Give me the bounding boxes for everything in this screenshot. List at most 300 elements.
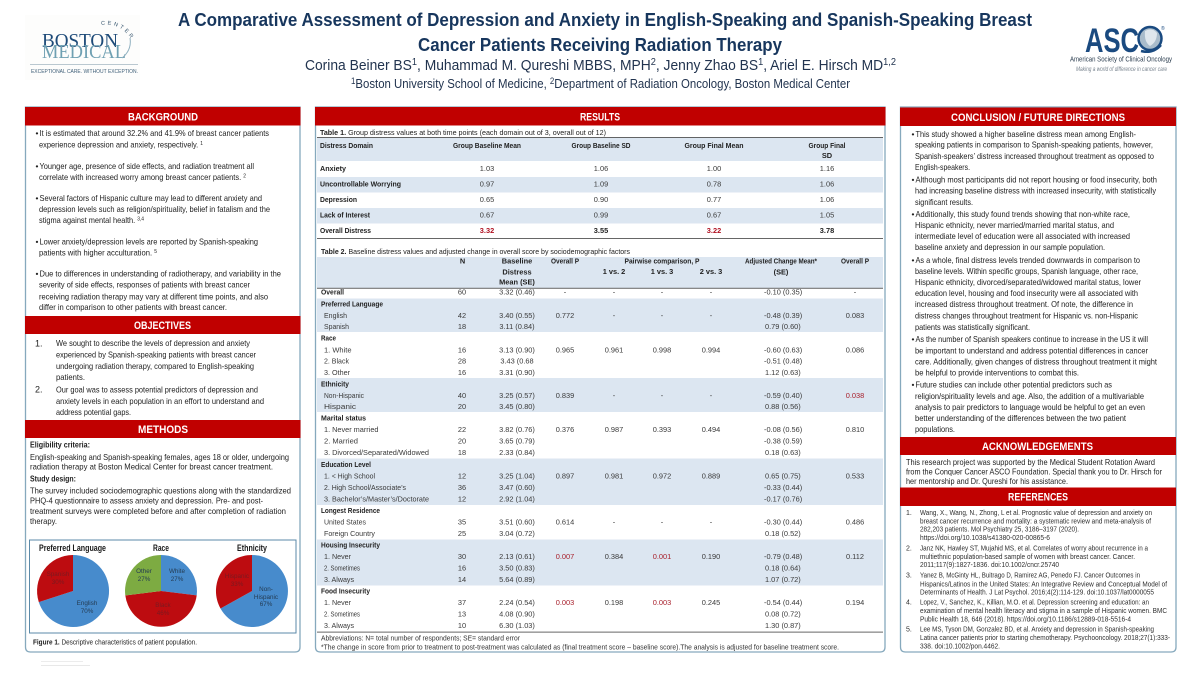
text block: conclusion bullets: be important to understand and address potential differences in cancer	[915, 346, 1148, 356]
group: housing insecurity: 0.190	[702, 552, 720, 561]
group: food insecurity: 10	[458, 621, 466, 630]
text block: objectives list: Our goal was to assess potential predictors of depression and	[56, 384, 258, 394]
list: references: multiethnic population-based sample of women with breast cancer. Cancer.	[920, 554, 1135, 561]
group: housing insecurity: 0.384	[605, 552, 623, 561]
group: food insecurity: 37	[458, 598, 466, 607]
group: education level: 0.897	[556, 471, 574, 480]
group: education level: 0.981	[605, 471, 623, 480]
row: overall distress: Overall Distress	[320, 226, 371, 235]
text block: background bullets: 1	[200, 141, 203, 147]
group: housing insecurity: -0.79 (0.48)	[764, 552, 802, 561]
authors: , Jenny Zhao BS	[656, 57, 758, 74]
row: overall distress	[320, 226, 834, 235]
text block: background bullets: stigma against mental health.	[39, 215, 148, 225]
text block: conclusion bullets: religion/spirituality levels and age. Also, the addition of a multivariable	[915, 391, 1144, 401]
group: marital status: Marital status	[321, 413, 366, 422]
group: education level: Education Level	[321, 460, 371, 469]
group: longest residence: 3.04 (0.72)	[499, 529, 535, 538]
text block: background bullets: It is estimated that around 32.2% and 41.9% of breast cancer patients	[40, 128, 269, 138]
text block: conclusion bullets: baseline anxiety and depression in our sample population.	[915, 242, 1105, 252]
row: uncontrollable worrying: Uncontrollable Worrying	[320, 180, 401, 188]
group: marital status: -0.38 (0.59)	[764, 436, 802, 445]
group: ethnicity: 20	[458, 402, 466, 411]
group: housing insecurity: 0.112	[846, 552, 864, 561]
text block: conclusion bullets: education level, housing and food insecurity were all associated with	[915, 288, 1138, 298]
chart: demographic pie charts	[30, 540, 296, 633]
group: housing insecurity: 1. Never	[324, 552, 352, 561]
text block: conclusion bullets: distress changes throughout treatment for Hispanic vs. non-Hispanic	[915, 310, 1138, 320]
text block: background bullets: receiving radiation therapy may vary at different time points, and also	[39, 292, 268, 302]
row: uncontrollable worrying: 1.09	[594, 180, 608, 188]
logo: Boston Medical Center	[30, 20, 138, 75]
table footnotes: *The change in score from prior to treatment to post-treatment was calculated as (final treatment score – baseline score).The analysis is adjusted for baseline treatment score.	[321, 642, 839, 652]
list: references: Hispanics/Latinos in the United States: An Integrative Review and Conceptual Model of	[920, 582, 1167, 588]
text block: conclusion bullets: Hispanic ethnicity, never married/married marital status, and	[915, 220, 1114, 230]
group: housing insecurity: 0.18 (0.64)	[765, 563, 801, 572]
figure caption: Figure 1. Descriptive characteristics of patient population.	[33, 638, 197, 646]
group: longest residence: Foreign Country	[324, 529, 375, 538]
table 2 header row: Mean (SE)	[499, 278, 535, 286]
group: race: Race	[321, 333, 336, 342]
group: preferred language: 3.11 (0.84)	[499, 322, 535, 331]
text block: background bullets: depression levels such as religion/spirituality, belief in fatalism and the	[39, 204, 270, 214]
group: marital status: 0.376	[556, 425, 574, 434]
group: ethnicity: Ethnicity	[321, 379, 350, 388]
group: food insecurity: 0.245	[702, 598, 720, 607]
pie chart: race: 27%	[171, 576, 184, 583]
text block: conclusion bullets: •	[912, 334, 914, 344]
group: ethnicity: 3.25 (0.57)	[499, 391, 535, 400]
pie chart: preferred language: Preferred Language	[39, 543, 106, 553]
pie chart: race: White	[169, 568, 186, 575]
text block: conclusion bullets: populations.	[915, 424, 955, 434]
row: lack of interest	[320, 210, 834, 220]
text block: acknowledgements: This research project was supported by the Medical Student Rotation Award	[906, 457, 1155, 467]
table 1 header row: Group Final Mean	[684, 141, 744, 150]
group: housing insecurity: 5.64 (0.89)	[499, 575, 535, 584]
group: longest residence: 3.51 (0.60)	[499, 517, 535, 526]
panel: right column	[900, 107, 1176, 652]
group: food insecurity: 2. Sometimes	[324, 609, 360, 618]
group: marital status: 0.810	[846, 425, 864, 434]
group: preferred language: 42	[458, 311, 466, 320]
list: references: 282,203 patients. Mol Psychiatry 25, 3186–3197 (2020).	[920, 526, 1079, 534]
group: longest residence: 25	[458, 529, 466, 538]
group: race: 16	[458, 345, 466, 354]
group: race: 16	[458, 368, 466, 377]
logo: ASCO: Making a world of difference in cancer care	[1076, 66, 1167, 73]
text block: conclusion bullets: patients was statistically significant.	[915, 322, 1030, 332]
list: references: Lee MS, Tyson DM, Gonzalez BD, et al. Anxiety and depression in Spanish-speaking	[920, 626, 1154, 634]
text block: conclusion bullets	[912, 129, 1158, 434]
group: food insecurity: 1.30 (0.87)	[765, 621, 801, 630]
table 2 header row: Adjusted Change Mean*	[745, 256, 817, 266]
group: race: 0.998	[653, 345, 671, 354]
group: housing insecurity: 16	[458, 563, 466, 572]
heading: conclusion and future directions: CONCLUSION / FUTURE DIRECTIONS	[951, 112, 1125, 124]
list: references: Determinants of Health. J Lat Psychol. 2016;4(2):114-129. doi:10.1037/lat0000055	[920, 590, 1154, 596]
heading: methods: METHODS	[138, 424, 188, 436]
group: race: 28	[458, 356, 466, 365]
group: preferred language: 0.083	[846, 311, 864, 320]
list: references: Public Health 18, 646 (2018). https://doi.org/10.1186/s12889-018-5516-4	[920, 616, 1131, 624]
title: A Comparative Assessment of Depression and Anxiety in English-Speaking and Spanish-Speaking Breast	[178, 9, 1032, 30]
group: marital status: 0.18 (0.63)	[765, 448, 801, 457]
group: marital status: 3. Divorced/Separated/Widowed	[324, 448, 429, 457]
heading: background	[25, 107, 300, 126]
text block: conclusion bullets: had increasing baseline distress with increased insecurity, with statistically	[915, 186, 1157, 196]
text block: objectives list	[35, 338, 264, 417]
heading: acknowledgements	[900, 437, 1176, 455]
group: education level: 3. Bachelor’s/Master’s/Doctorate	[324, 494, 429, 503]
pie chart: ethnicity: 33%	[231, 581, 244, 588]
group: race: 0.994	[702, 345, 720, 354]
table 1 header row: Group Baseline SD	[572, 141, 631, 150]
group: marital status: 20	[458, 436, 466, 445]
authors: 2	[651, 57, 656, 68]
group: longest residence: Longest Residence	[321, 506, 380, 515]
group: marital status: 0.393	[653, 425, 671, 434]
affiliations: 1	[351, 76, 355, 86]
group: housing insecurity: 0.007	[556, 552, 574, 561]
group: ethnicity	[321, 379, 864, 411]
text block: conclusion bullets: baseline levels. Within specific groups, Spanish language, other race,	[915, 266, 1138, 276]
group: ethnicity: 0.038	[846, 391, 864, 400]
authors: Corina Beiner BS	[305, 57, 421, 74]
pie chart: preferred language: 30%	[52, 579, 65, 586]
group: race: 3.31 (0.90)	[499, 368, 535, 377]
list: references: https://doi.org/10.1038/s41380-020-00865-6	[920, 535, 1050, 542]
group: longest residence: 35	[458, 517, 466, 526]
pie chart: preferred language: English	[77, 600, 98, 607]
row: overall: -	[710, 287, 713, 296]
group: preferred language: -	[661, 311, 664, 320]
group: education level: 12	[458, 494, 466, 503]
group: race: 0.086	[846, 345, 864, 354]
list: references: Yanez B, McGinty HL, Buitrago D, Ramirez AG, Penedo FJ. Cancer Outcomes in	[920, 572, 1140, 580]
group: food insecurity: 2.24 (0.54)	[499, 598, 535, 607]
group: race: 0.965	[556, 345, 574, 354]
authors: 1	[412, 57, 417, 68]
heading: results	[315, 107, 886, 126]
row: overall: -	[661, 287, 664, 296]
group: education level: 0.533	[846, 471, 864, 480]
text block: objectives list: undergoing radiation therapy, compared to English-speaking	[56, 361, 254, 371]
table 2 header row: 1 vs. 3	[651, 267, 673, 276]
row: depression: 1.06	[820, 195, 834, 204]
text block: conclusion bullets: As a whole, final distress levels trended downwards in comparison to	[916, 255, 1140, 265]
heading: conclusion and future directions	[900, 108, 1176, 126]
text block: background bullets: Lower anxiety/depression levels are reported by Spanish-speaking	[40, 236, 258, 246]
logo: Boston Medical Center: EXCEPTIONAL CARE. WITHOUT EXCEPTION.	[31, 69, 138, 75]
group: food insecurity: 3. Always	[324, 621, 354, 630]
text block: background bullets: •	[36, 268, 38, 278]
affiliations: Boston University School of Medicine,	[355, 76, 550, 91]
list: references: breast cancer recurrence and mortality: a systematic review and meta-analysis of	[920, 518, 1151, 526]
row: overall: -0.10 (0.35)	[764, 287, 802, 296]
table 2 header row: Overall P	[841, 256, 869, 266]
logo: Boston Medical Center: MEDICAL	[42, 41, 126, 63]
list: references: Lopez, V., Sanchez, K., Killian, M.O. et al. Depression screening and education: an	[920, 600, 1149, 606]
row: depression: 0.77	[707, 195, 721, 204]
group: preferred language: -	[613, 311, 616, 320]
group: race: 3. Other	[324, 368, 351, 377]
row: anxiety	[320, 164, 834, 173]
group: ethnicity: -	[661, 391, 664, 400]
row: uncontrollable worrying: 1.06	[820, 180, 834, 188]
group: marital status: 1. Never married	[324, 425, 378, 434]
table footnotes: Abbreviations: N= total number of respondents; SE= standard error	[321, 634, 521, 642]
group: education level: 3.47 (0.60)	[499, 483, 535, 492]
pie chart: race: Race	[153, 543, 169, 553]
group: preferred language: English	[324, 311, 347, 320]
group: housing insecurity: 1.07 (0.72)	[765, 575, 801, 584]
pie chart: race: 27%	[138, 576, 151, 583]
row: overall: Overall	[321, 287, 344, 296]
text block: objectives list: patients.	[56, 372, 85, 382]
text block: conclusion bullets: As the number of Spanish speakers continue to increase in the US it will	[916, 334, 1148, 344]
group: race: 3.43 (0.68	[500, 356, 534, 365]
text block: background bullets: Younger age, presence of side effects, and radiation treatment all	[40, 161, 254, 171]
list: references: 1.	[906, 510, 912, 517]
group: preferred language	[321, 299, 864, 331]
group: education level: 3.25 (1.04)	[499, 471, 535, 480]
row: overall: 60	[458, 287, 466, 296]
group: housing insecurity: 0.001	[653, 552, 671, 561]
row: depression: 0.90	[594, 195, 608, 204]
row: lack of interest: 0.67	[707, 210, 721, 220]
pie chart: preferred language: Spanish	[47, 571, 70, 578]
group: preferred language: 18	[458, 322, 466, 331]
pie chart: ethnicity: Ethnicity	[237, 543, 267, 553]
group: food insecurity: -0.54 (0.44)	[764, 598, 802, 607]
title	[178, 9, 1032, 55]
text block: background bullets: •	[36, 193, 38, 203]
group: marital status: 2.33 (0.84)	[499, 448, 535, 457]
table 2 header row	[460, 256, 869, 286]
group: longest residence: 0.18 (0.52)	[765, 529, 801, 538]
group: food insecurity: 0.194	[846, 598, 864, 607]
pie chart: race	[125, 543, 197, 627]
group: education level: 0.889	[702, 471, 720, 480]
group: ethnicity: -	[613, 391, 616, 400]
table 2 header row: Overall P	[551, 256, 579, 266]
row: uncontrollable worrying: 0.78	[707, 180, 721, 188]
table 2 header row: Pairwise comparison, P	[624, 256, 700, 266]
group: preferred language: 0.772	[556, 311, 574, 320]
logo: Boston Medical Center: BOSTON	[42, 30, 118, 52]
row: overall: 3.32 (0.46)	[499, 287, 535, 296]
text block: conclusion bullets: significant results.	[915, 197, 973, 207]
text block: methods	[30, 440, 291, 526]
group: race: -0.60 (0.63)	[764, 345, 802, 354]
authors: 1,2	[883, 57, 896, 68]
list: references: Latina cancer patients prior to starting chemotherapy. Psychooncology. 2018;27(1):333-	[920, 635, 1171, 642]
row: anxiety: Anxiety	[320, 164, 347, 173]
text block: background bullets: patients with higher acculturation.	[39, 248, 163, 258]
row: anxiety: 1.03	[480, 164, 494, 173]
text block: background bullets: Due to differences in understanding of radiotherapy, and variability in the	[40, 268, 281, 278]
heading: acknowledgements: ACKNOWLEDGEMENTS	[982, 441, 1093, 453]
group: education level: 36	[458, 483, 466, 492]
text block: objectives list: 2.	[35, 384, 43, 394]
group: preferred language: -0.48 (0.39)	[764, 311, 802, 320]
logo: ASCO: American Society of Clinical Oncology	[1070, 54, 1172, 64]
text block: methods: treatment surveys were completed before and after completion of radiation	[30, 506, 286, 516]
group: housing insecurity: 3. Always	[324, 575, 354, 584]
logo: ASCO: ASC	[1085, 22, 1139, 60]
text block: methods: PHQ-4 questionnaire to assess anxiety and depression. Pre- and post-	[30, 496, 263, 506]
list: references: 4.	[906, 600, 912, 606]
group: education level: 2.92 (1.04)	[499, 494, 535, 503]
group: food insecurity	[321, 586, 864, 630]
list: references: 3.	[906, 572, 912, 580]
group: marital status: -0.08 (0.56)	[764, 425, 802, 434]
row: overall: -	[613, 287, 616, 296]
text block: conclusion bullets: Future studies can include other potential predictors such as	[916, 380, 1112, 390]
text block: background bullets: 3,4	[137, 216, 144, 222]
group: food insecurity: 6.30 (1.03)	[499, 621, 535, 630]
group: food insecurity: 4.08 (0.90)	[499, 609, 535, 618]
heading: objectives: OBJECTIVES	[134, 320, 191, 332]
heading: references	[900, 488, 1176, 506]
heading: references: REFERENCES	[1008, 492, 1068, 504]
text block: background bullets: differ in comparison to other patients with breast cancer.	[39, 302, 227, 312]
group: preferred language: Spanish	[324, 322, 349, 331]
heading: background: BACKGROUND	[128, 112, 198, 124]
group: preferred language: 0.79 (0.60)	[765, 322, 801, 331]
pie chart: ethnicity	[216, 543, 288, 627]
text block: background bullets: •	[36, 236, 38, 246]
group: race: 3.13 (0.90)	[499, 345, 535, 354]
text block: conclusion bullets: intermediate level of education were all associated with increased	[915, 231, 1130, 241]
row: overall distress: 3.55	[594, 226, 608, 235]
group: education level: 12	[458, 471, 466, 480]
text block: conclusion bullets: Additionally, this study found trends showing that non-white race,	[916, 209, 1130, 219]
text block: conclusion bullets: speaking patients in comparison to Spanish-speaking patients, however,	[915, 140, 1153, 150]
pie chart: preferred language	[37, 543, 109, 627]
row: lack of interest: Lack of Interest	[320, 210, 370, 220]
logo: ASCO	[1070, 22, 1172, 73]
table footnotes	[321, 634, 839, 652]
logo: ASCO: ®	[1161, 25, 1165, 32]
group: education level	[321, 460, 864, 503]
group: ethnicity: 40	[458, 391, 466, 400]
group: housing insecurity: 30	[458, 552, 466, 561]
table 1 caption: Table 1. Group distress values at both time points (each domain out of 3, overall out of 12)	[320, 128, 606, 137]
text block: acknowledgements	[906, 457, 1162, 486]
group: education level: -0.33 (0.44)	[764, 483, 802, 492]
row: overall: -	[564, 287, 567, 296]
table 2 body rows	[321, 287, 864, 630]
group: marital status: 3.82 (0.76)	[499, 425, 535, 434]
row: lack of interest: 1.05	[820, 210, 834, 220]
group: housing insecurity: 2.13 (0.61)	[499, 552, 535, 561]
group: housing insecurity: Housing Insecurity	[321, 540, 381, 549]
group: education level: 0.65 (0.75)	[765, 471, 801, 480]
group: marital status: 0.494	[702, 425, 720, 434]
text block: conclusion bullets: better understanding of the differences between the two patient	[915, 413, 1127, 423]
text block: background bullets: experience depression and anxiety, respectively.	[39, 140, 218, 150]
authors: , Ariel E. Hirsch MD	[763, 57, 883, 74]
text block: background bullets: 5	[154, 249, 157, 255]
text block: background bullets: Several factors of Hispanic culture may lead to different anxiety and	[40, 193, 262, 203]
table 2: baseline distress and adjusted change	[317, 256, 883, 633]
table 1 header row: SD	[822, 151, 833, 160]
text block: methods: therapy.	[30, 516, 57, 526]
group: housing insecurity: 2. Sometimes	[324, 563, 360, 572]
title: Cancer Patients Receiving Radiation Therapy	[418, 34, 783, 55]
group: ethnicity: Hispanic	[324, 402, 356, 411]
list: references: 2.	[906, 546, 912, 552]
group: education level: 2. High School/Associate’s	[324, 483, 406, 492]
heading: results: RESULTS	[580, 112, 620, 124]
text block: conclusion bullets: English-speakers.	[915, 162, 970, 172]
text block: methods: Study design:	[30, 474, 76, 484]
text block: objectives list: address potential gaps.	[56, 407, 131, 417]
text block: conclusion bullets: •	[912, 255, 914, 265]
row: anxiety: 1.16	[820, 164, 834, 173]
pie chart: ethnicity: Hispanic	[225, 573, 249, 580]
text block: objectives list: 1.	[35, 338, 43, 348]
group: housing insecurity: 3.50 (0.83)	[499, 563, 535, 572]
affiliations: 2	[550, 76, 554, 86]
group: race: -0.51 (0.48)	[764, 356, 802, 365]
group: race	[321, 333, 864, 377]
text block: background bullets: •	[36, 128, 38, 138]
panel: left column	[25, 107, 300, 652]
row: depression: 0.65	[480, 195, 494, 204]
group: preferred language: 3.40 (0.55)	[499, 311, 535, 320]
group: food insecurity: 0.08 (0.72)	[765, 609, 801, 618]
authors: 1	[758, 57, 764, 68]
heading: objectives	[25, 316, 300, 334]
table 2 caption: Table 2. Baseline distress values and adjusted change in overall score by sociodemographic factors	[321, 247, 630, 256]
group: ethnicity: -0.59 (0.40)	[764, 391, 802, 400]
row: overall: -	[854, 287, 857, 296]
text block: conclusion bullets: Spanish-speakers’ distress increased throughout treatment as opposed to	[915, 151, 1154, 161]
group: education level: 1. < High School	[324, 471, 375, 480]
text block: background bullets: severity of side effects, responses of patients with breast cancer	[39, 280, 250, 290]
group: preferred language: Preferred Language	[321, 299, 383, 308]
group: longest residence: -	[661, 517, 664, 526]
text block: background bullets: correlate with increased worry among breast cancer patients.	[39, 172, 265, 182]
pie chart: race: Black	[155, 602, 172, 609]
row: depression	[320, 195, 834, 204]
row: anxiety: 1.00	[707, 164, 721, 173]
pie chart: race: 46%	[157, 610, 170, 617]
pie chart: ethnicity: Hispanic	[254, 594, 278, 601]
row: overall distress: 3.22	[707, 226, 721, 235]
text block: methods: radiation therapy at Boston Medical Center for breast cancer treatment.	[30, 462, 273, 472]
group: food insecurity: 13	[458, 609, 466, 618]
group: education level: -0.17 (0.76)	[764, 494, 802, 503]
text block: acknowledgements: from the Conquer Cancer ASCO Foundation. Special thank you to Dr. Hirsch for	[906, 466, 1162, 476]
group: race: 1. White	[324, 345, 352, 354]
table 2 header row: 1 vs. 2	[603, 267, 625, 276]
panel: results	[315, 107, 886, 652]
table 2 header row: N	[460, 256, 465, 266]
row: depression: Depression	[320, 195, 357, 204]
heading: methods	[25, 420, 300, 438]
group: housing insecurity: 14	[458, 575, 466, 584]
group: food insecurity: 1. Never	[324, 598, 352, 607]
text block: conclusion bullets: •	[912, 174, 914, 184]
pie chart: preferred language: 70%	[81, 608, 94, 615]
table 1: group distress values	[317, 137, 883, 239]
text block: objectives list: anxiety levels in each population in an effort to understand and	[56, 396, 264, 406]
text block: background bullets: •	[36, 161, 38, 171]
